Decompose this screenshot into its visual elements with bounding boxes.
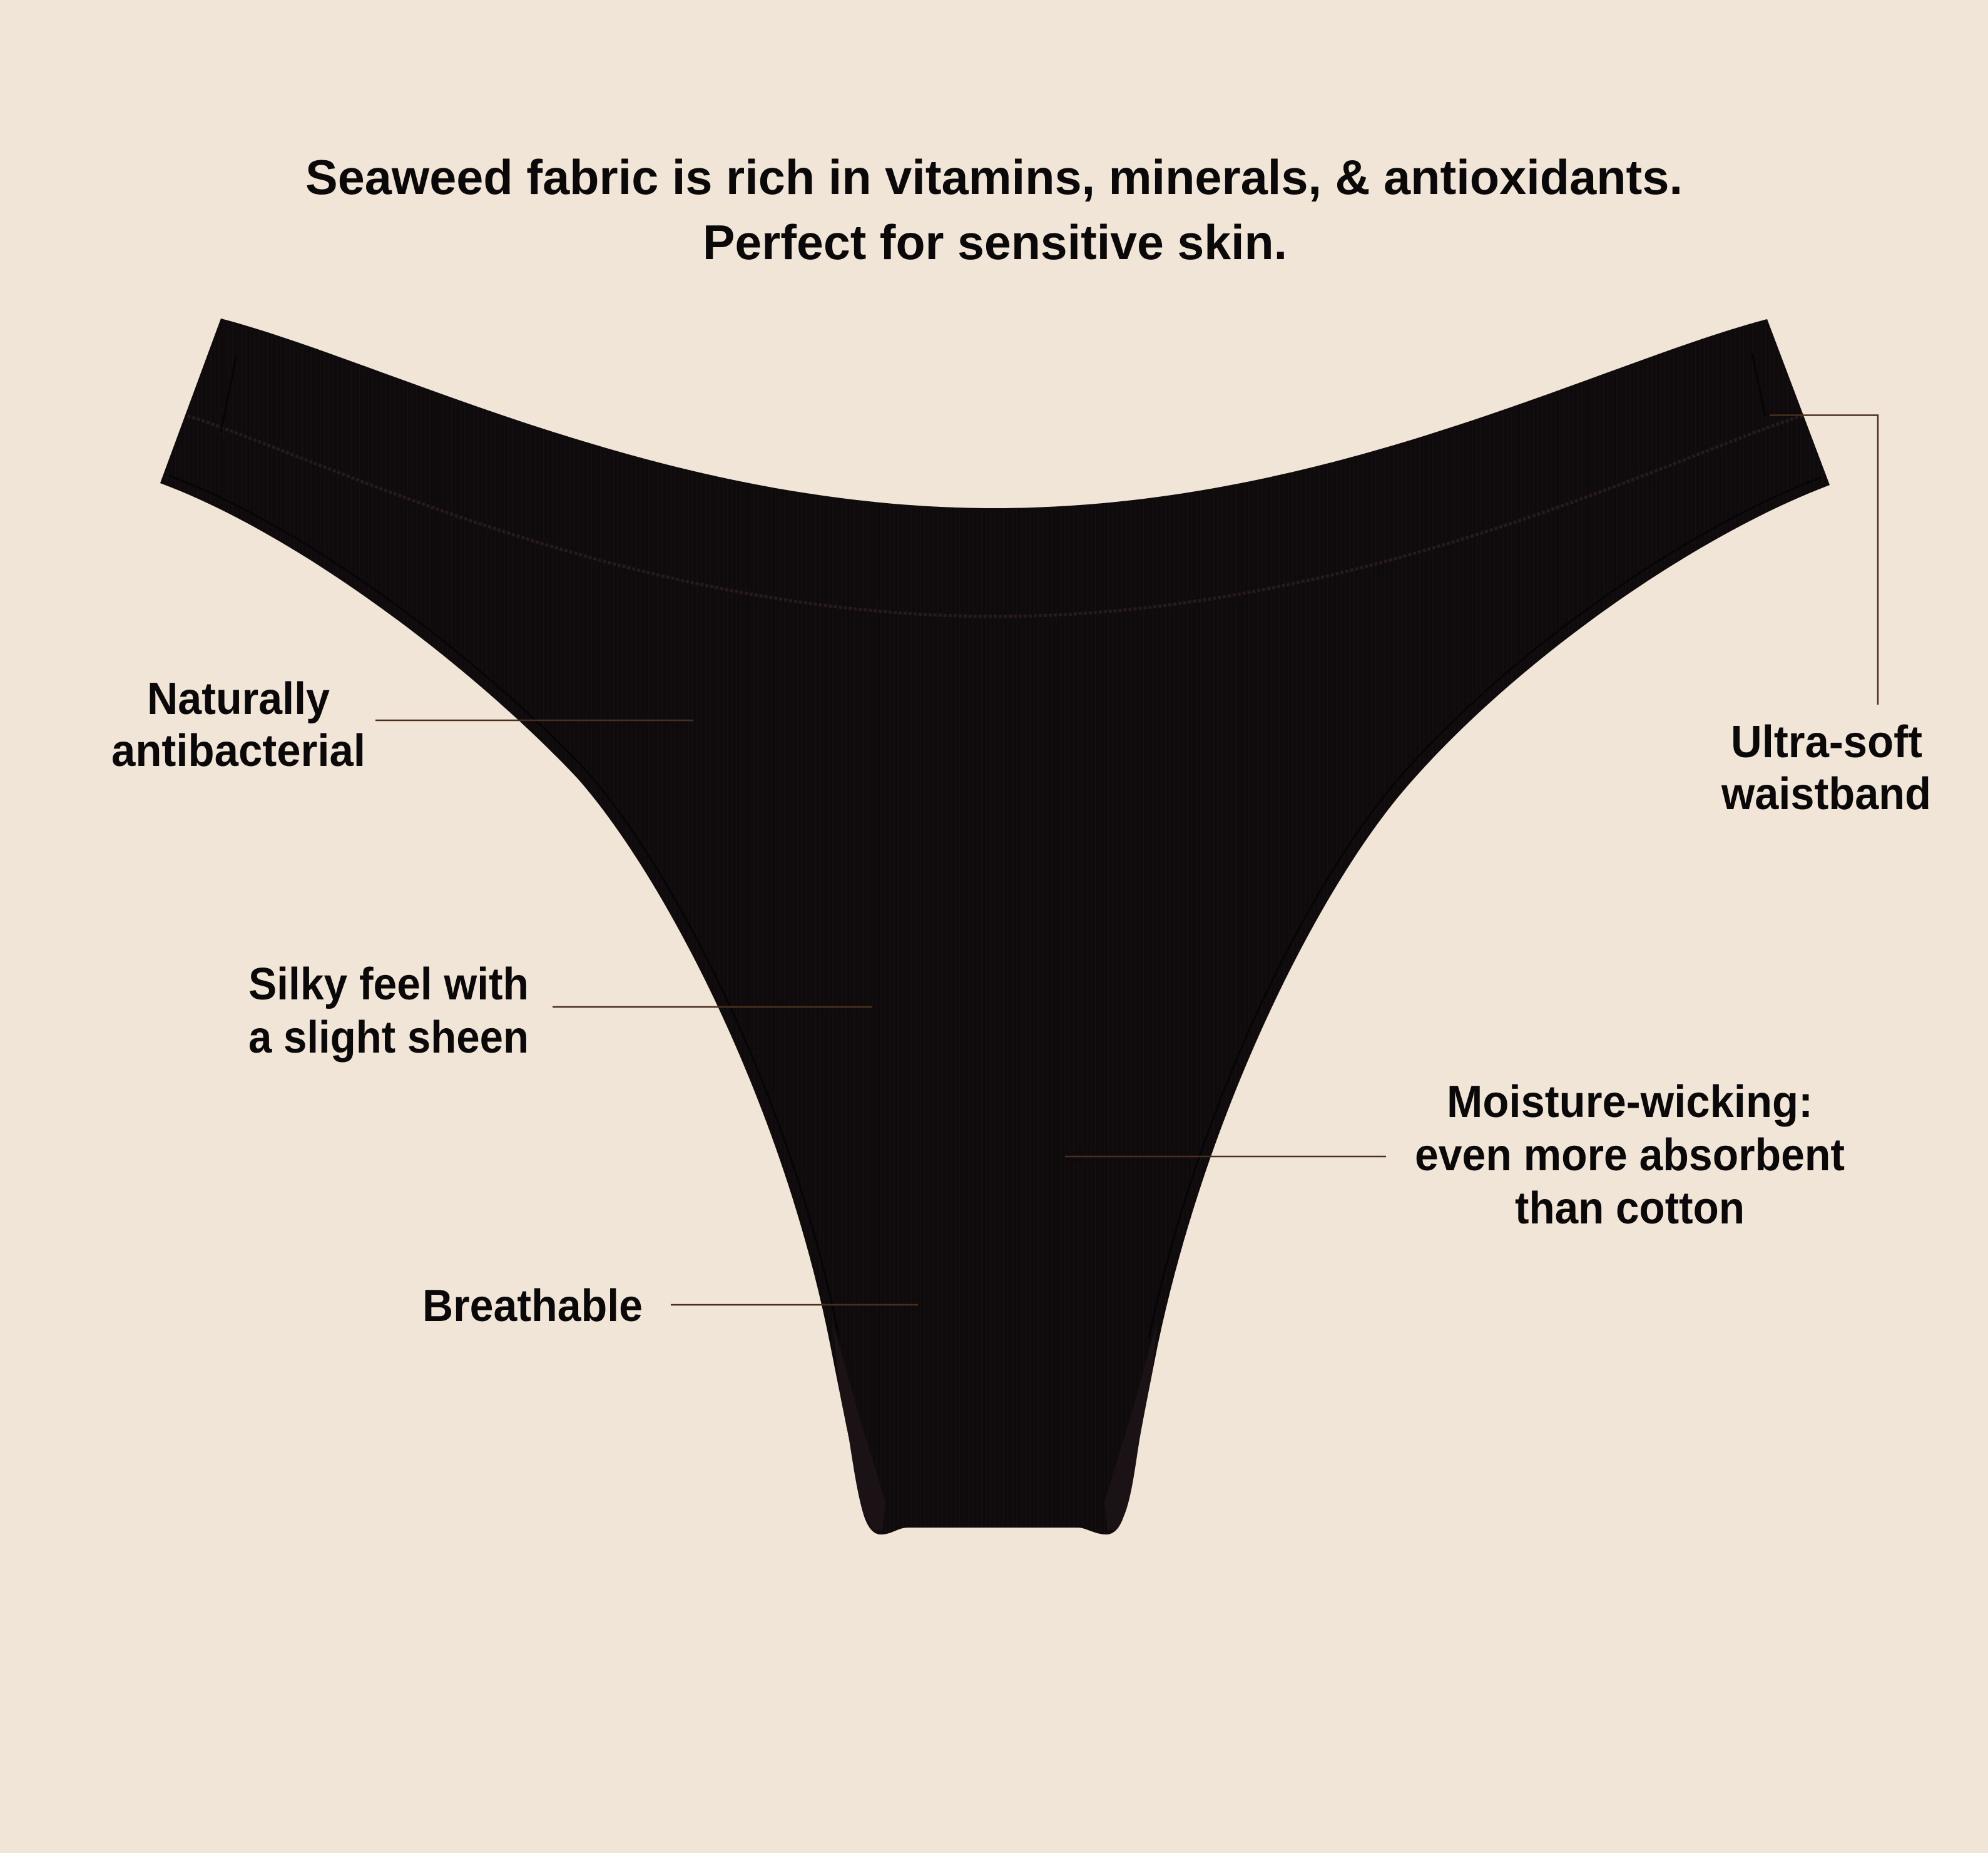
garment: black seaweed-fabric thong bbox=[125, 282, 1877, 1565]
callout: Moisture-wicking bbox=[1065, 1077, 1845, 1233]
callout: Moisture-wicking: even more absorbent bbox=[1415, 1130, 1845, 1180]
callout: Silky feel with a slight sheen bbox=[248, 959, 872, 1063]
callout: Naturally antibacterial: antibacterial bbox=[111, 726, 365, 776]
callout: Naturally antibacterial bbox=[111, 674, 693, 776]
callout: Moisture-wicking: Moisture-wicking: bbox=[1447, 1077, 1813, 1127]
callout: Silky feel with a slight sheen: a slight sheen bbox=[248, 1013, 529, 1063]
callout: Naturally antibacterial: Naturally bbox=[147, 674, 330, 724]
title: Seaweed fabric is rich in vitamins, minerals, & antioxidants. bbox=[305, 150, 1683, 205]
title bbox=[305, 150, 1683, 270]
title: Perfect for sensitive skin. bbox=[703, 215, 1287, 270]
callout: Ultra-soft waistband: waistband bbox=[1721, 769, 1931, 819]
callout: Moisture-wicking: than cotton bbox=[1515, 1183, 1745, 1233]
callout: Ultra-soft waistband: Ultra-soft bbox=[1731, 717, 1922, 767]
callout: Ultra-soft waistband bbox=[1721, 416, 1931, 819]
callout: Silky feel with a slight sheen: Silky feel with bbox=[248, 959, 529, 1009]
callout: Breathable: Breathable bbox=[422, 1281, 643, 1331]
